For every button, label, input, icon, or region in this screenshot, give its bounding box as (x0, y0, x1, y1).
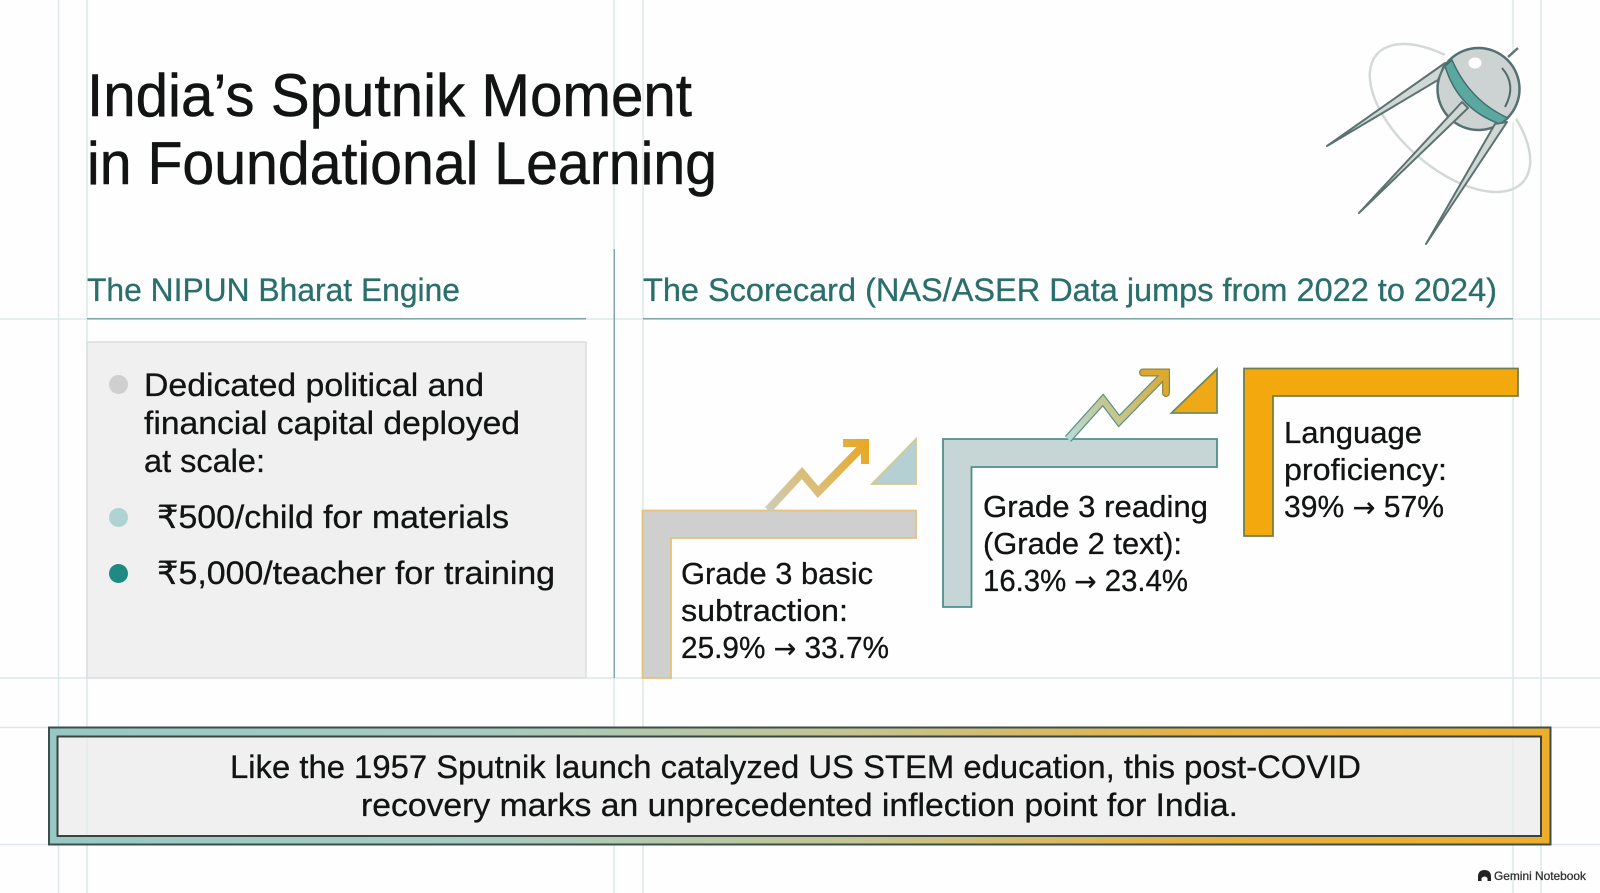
panel: NIPUN Bharat Engine (87, 342, 586, 678)
text: language: Language (1284, 415, 1422, 450)
text: subtraction (681, 556, 889, 665)
text: subtraction: 25.9% → 33.7% (681, 630, 889, 665)
bullet: child materials: ₹500/child for materials (157, 499, 509, 535)
bullet: dedicated capital: at scale: (144, 443, 265, 479)
divider: vertical rule between columns (614, 249, 615, 678)
title (87, 62, 717, 197)
callout text: Like the 1957 Sputnik launch catalyzed US STEM education, this post-COVID (230, 749, 1361, 785)
heading rule: right (643, 318, 1513, 320)
step 3: language proficiency (1244, 368, 1518, 536)
icon: sputnik satellite (1327, 17, 1556, 244)
bullet: dedicated capital (109, 367, 520, 479)
callout text: recovery marks an unprecedented inflection point for India. (361, 787, 1238, 823)
bullet: dedicated capital: financial capital deployed (144, 405, 520, 441)
text: language: proficiency: (1284, 452, 1447, 487)
text: reading (983, 489, 1208, 598)
text: reading: (Grade 2 text): (983, 526, 1182, 561)
text: language (1284, 415, 1447, 524)
text: subtraction: subtraction: (681, 593, 848, 628)
heading: The Scorecard: The Scorecard (NAS/ASER Data jumps from 2022 to 2024) (643, 272, 1497, 308)
title: India’s Sputnik Moment (87, 62, 692, 129)
callout banner (49, 728, 1550, 844)
step 2: grade 3 reading (943, 369, 1217, 607)
icon: triangle 1 (872, 439, 916, 484)
bullet: teacher training: ₹5,000/teacher for training (157, 555, 555, 591)
text: reading: Grade 3 reading (983, 489, 1208, 524)
heading rule: left (87, 318, 586, 320)
heading: The NIPUN Bharat Engine: The NIPUN Bharat Engine (87, 272, 460, 308)
watermark: Gemini Notebook: Gemini Notebook (1494, 869, 1587, 883)
icon: rising arrow 1 (768, 443, 865, 510)
callout text (230, 749, 1361, 823)
text: subtraction: Grade 3 basic (681, 556, 873, 591)
bullet: dedicated capital: Dedicated political and (144, 367, 484, 403)
title: in Foundational Learning (87, 130, 717, 197)
icon: rising arrow 2 (1068, 372, 1166, 439)
step 1: grade 3 subtraction (642, 439, 916, 678)
icon: triangle 2 (1172, 369, 1217, 413)
text: reading: 16.3% → 23.4% (983, 563, 1188, 598)
text: language: 39% → 57% (1284, 489, 1444, 524)
